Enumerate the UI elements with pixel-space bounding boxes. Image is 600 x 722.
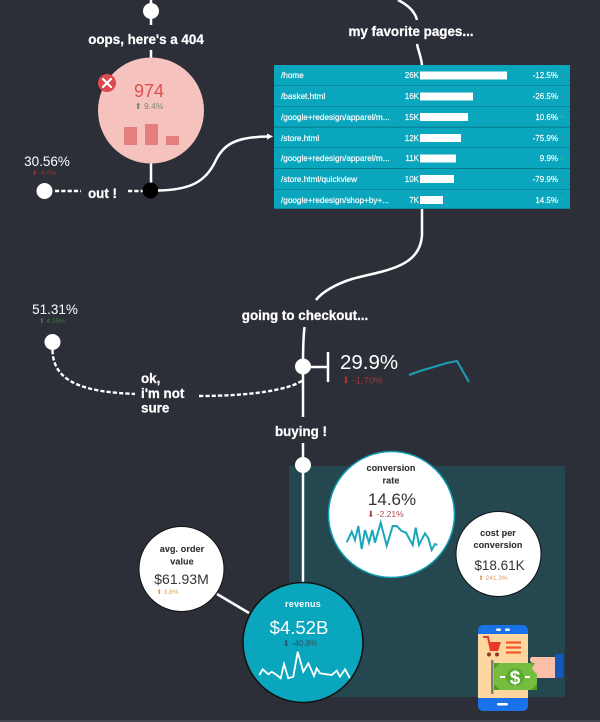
row: home: 26K	[405, 71, 420, 80]
row: home: -12.5%	[533, 71, 558, 80]
icon: phone payment: $	[510, 668, 521, 689]
heading: ok, i'm not sure: ok,	[141, 371, 160, 386]
row: apparel 2: 9.9%	[540, 154, 558, 163]
panel: cost per conversion	[456, 512, 541, 596]
conversion sparkline	[347, 523, 437, 550]
dashed line: unsure	[52, 350, 303, 396]
cost label: conversion	[473, 540, 523, 550]
row: shop: 7K	[409, 196, 420, 205]
revenue sparkline	[259, 652, 350, 678]
row: apparel 1: 10.6%	[535, 113, 558, 122]
revenue change: ⬇ -40.8%	[283, 639, 317, 648]
cost label: cost per	[480, 528, 516, 538]
row: basket: /basket.html	[281, 92, 325, 101]
panel: 404 circle	[98, 58, 204, 164]
row: store: /store.html	[281, 134, 319, 143]
stat: checkout rate: ⬇ -1.70%	[342, 376, 383, 386]
row: shop: 14.5%	[535, 196, 558, 205]
aov value: $61.93M	[154, 571, 209, 587]
row: basket: -26.5%	[533, 92, 558, 101]
dot: unsure	[44, 334, 60, 350]
cost change: ⬆ 241.3%	[478, 574, 508, 582]
heading: buying: buying !	[275, 424, 327, 439]
conversion label: rate	[383, 476, 399, 486]
row: apparel 2: 11K	[405, 154, 420, 163]
aov label: value	[170, 556, 194, 566]
icon: phone payment	[478, 625, 563, 711]
heading: ok, i'm not sure: i'm not	[141, 386, 185, 401]
dashed line: out	[55, 190, 143, 192]
panel: revenue	[243, 582, 363, 702]
conversion label: conversion	[366, 463, 416, 473]
row: shop: /google+redesign/shop+by+...	[281, 196, 389, 205]
dot: black junction	[142, 182, 158, 198]
panel: pages table	[274, 65, 570, 209]
heading: favorite pages: my favorite pages...	[348, 24, 474, 39]
row: apparel 1	[274, 107, 570, 127]
heading: ok, i'm not sure: sure	[141, 400, 169, 416]
dot: buying	[295, 457, 311, 473]
stat: exit rate: ⬇ -6.0%	[32, 169, 56, 177]
panel: average order value	[139, 526, 224, 612]
stat: unsure rate: 51.31%	[32, 302, 78, 317]
conversion value: 14.6%	[368, 490, 416, 509]
panel: conversion rate	[328, 452, 454, 578]
stat: checkout rate: 29.9%	[340, 351, 398, 374]
stat: unsure rate: ⬆ 4.25%	[39, 317, 65, 325]
row: store	[274, 128, 570, 147]
row: quickview: 10K	[405, 175, 420, 184]
cost value: $18.61K	[474, 558, 525, 573]
stat: checkout rate	[340, 351, 398, 386]
row: basket	[274, 86, 570, 106]
heading: oops: oops, here's a 404	[88, 32, 204, 47]
stat: unsure rate	[32, 302, 78, 325]
row: apparel 2: /google+redesign/apparel/m...	[281, 154, 390, 163]
row: quickview: /store.html/quickview	[281, 175, 357, 184]
404 value: 974	[134, 81, 164, 101]
sparkline: checkout	[409, 361, 469, 382]
aov label: avg. order	[160, 544, 204, 554]
heading: out: out !	[88, 186, 117, 201]
teal buying panel	[289, 466, 565, 697]
dot: exit	[36, 183, 52, 199]
stat: exit rate: 30.56%	[24, 154, 70, 169]
conversion change: ⬇ -2.21%	[367, 509, 404, 519]
404 bars	[124, 124, 179, 145]
revenue label: revenus	[285, 599, 321, 609]
row: store: -75.9%	[533, 134, 558, 143]
heading: checkout: going to checkout...	[242, 308, 368, 323]
row: store: 12K	[405, 134, 420, 143]
revenue value: $4.52B	[270, 617, 328, 638]
row: quickview	[274, 169, 570, 189]
404 change: ⬆ 9.4%	[135, 101, 164, 111]
flow lines	[151, 0, 422, 613]
stat: exit rate	[24, 154, 70, 177]
row: basket: 16K	[405, 92, 420, 101]
row: home: /home	[281, 71, 304, 80]
row: quickview: -79.9%	[533, 175, 558, 184]
bottom edge	[0, 720, 600, 722]
dot: top	[143, 3, 159, 19]
dot: checkout	[295, 358, 311, 374]
row: shop	[274, 190, 570, 208]
row: apparel 1: 15K	[405, 113, 420, 122]
icon: error badge	[98, 74, 116, 92]
arrow: to favorite pages	[158, 134, 273, 190]
aov change: ⬆ 3.8%	[156, 588, 179, 596]
row: apparel 2	[274, 148, 570, 168]
row: home	[274, 65, 570, 85]
row: apparel 1: /google+redesign/apparel/m...	[281, 113, 390, 122]
